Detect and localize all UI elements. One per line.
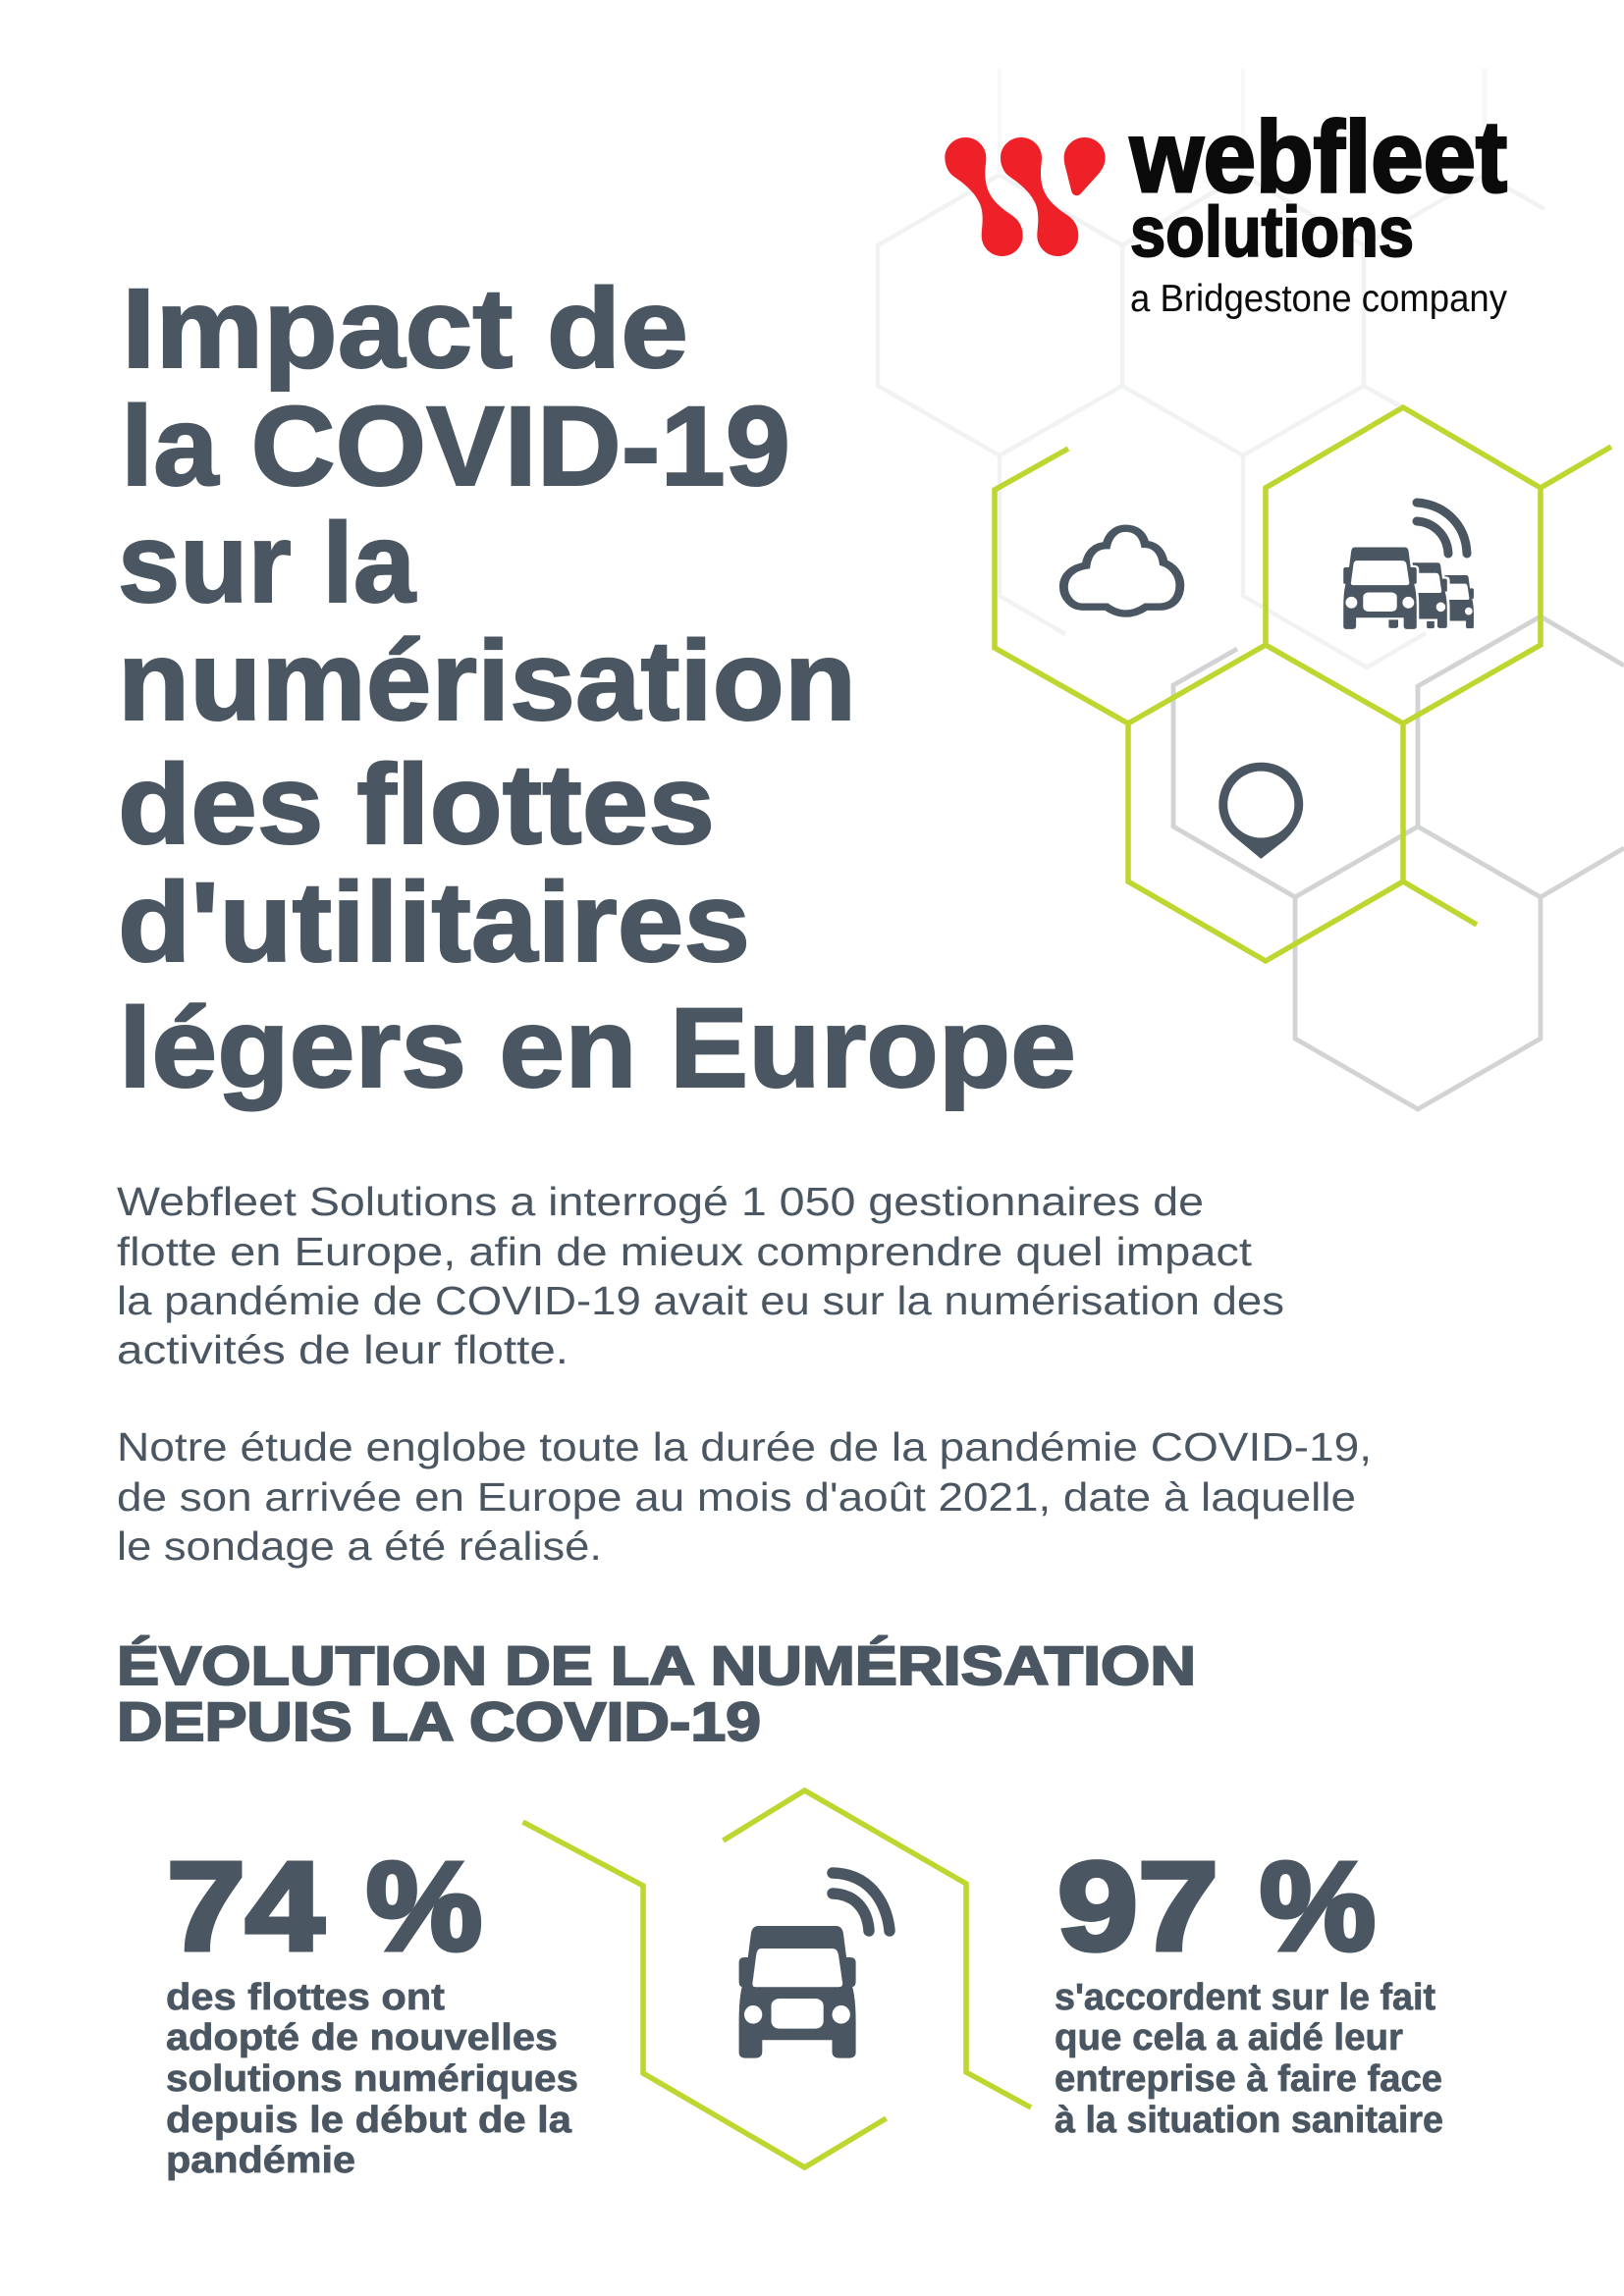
logo wordmark: solutions: [1130, 193, 1414, 272]
icon: connected truck: [739, 1873, 890, 2058]
middle truck: [1387, 561, 1448, 629]
hexagon pattern: grey outlines: [1173, 616, 1624, 1109]
stat description: pandémie: [166, 2140, 355, 2181]
logo wordmark: [1129, 100, 1507, 320]
logo wordmark: webfleet: [1129, 100, 1507, 213]
intro paragraph 1: Webfleet Solutions a interrogé 1 050 gestionnaires de: [117, 1179, 1204, 1224]
section heading: ÉVOLUTION DE LA NUMÉRISATION: [117, 1634, 1196, 1696]
icon: location pin: [1218, 763, 1303, 859]
title: Impact de: [122, 266, 688, 392]
intro paragraph 1: activités de leur flotte.: [117, 1327, 568, 1372]
stat: 74 %: [166, 1837, 578, 2181]
stat description: solutions numériques: [166, 2058, 578, 2100]
logo wordmark: a Bridgestone company: [1130, 278, 1507, 320]
hexagon pattern: light background: [878, 69, 1544, 667]
stat description: entreprise à faire face: [1055, 2058, 1442, 2100]
intro paragraph 1: [117, 1179, 1284, 1372]
signal arcs: [1417, 503, 1467, 554]
logo mark: [945, 137, 1106, 256]
logo: Webfleet Solutions: [945, 100, 1507, 320]
front truck: [1342, 546, 1418, 630]
title: numérisation: [118, 618, 856, 744]
icon: cloud: [1063, 528, 1180, 614]
intro paragraph 2: Notre étude englobe toute la durée de la pandémie COVID-19,: [117, 1424, 1372, 1469]
title: légers en Europe: [119, 986, 1076, 1111]
centre hexagon outline: [522, 1790, 1031, 2167]
stat description: [166, 1977, 578, 2181]
hexagon pattern: green outlines: [995, 407, 1611, 961]
icon: connected truck fleet: [1342, 503, 1475, 630]
stat: 97 %: 97: [1057, 1837, 1218, 1977]
intro paragraph 2: [117, 1424, 1372, 1569]
stat description: des flottes ont: [166, 1977, 445, 2018]
stat description: depuis le début de la: [166, 2100, 572, 2141]
stat: 74 %: 74: [167, 1837, 324, 1977]
section heading: DEPUIS LA COVID-19: [117, 1690, 761, 1752]
stat: 97 %: [1055, 1837, 1443, 2141]
small truck rear: [1426, 574, 1475, 629]
title: d'utilitaires: [118, 860, 750, 986]
stat description: [1055, 1977, 1443, 2141]
stat description: s'accordent sur le fait: [1055, 1977, 1435, 2018]
title: [118, 266, 1076, 1111]
intro paragraph 2: de son arrivée en Europe au mois d'août 2021, date à laquelle: [117, 1474, 1356, 1520]
stat: 97 %: %: [1260, 1837, 1376, 1977]
section heading: [117, 1634, 1196, 1752]
intro paragraph 1: la pandémie de COVID-19 avait eu sur la numérisation des: [117, 1278, 1284, 1323]
stat description: que cela a aidé leur: [1055, 2017, 1403, 2058]
title: sur la: [118, 501, 416, 626]
intro paragraph 2: le sondage a été réalisé.: [117, 1523, 602, 1569]
intro paragraph 1: flotte en Europe, afin de mieux comprendre quel impact: [117, 1229, 1253, 1274]
title: la COVID-19: [121, 384, 790, 509]
stat description: à la situation sanitaire: [1055, 2100, 1443, 2141]
stat: 74 %: %: [366, 1837, 482, 1977]
stat description: adopté de nouvelles: [166, 2017, 558, 2058]
title: des flottes: [118, 742, 715, 868]
